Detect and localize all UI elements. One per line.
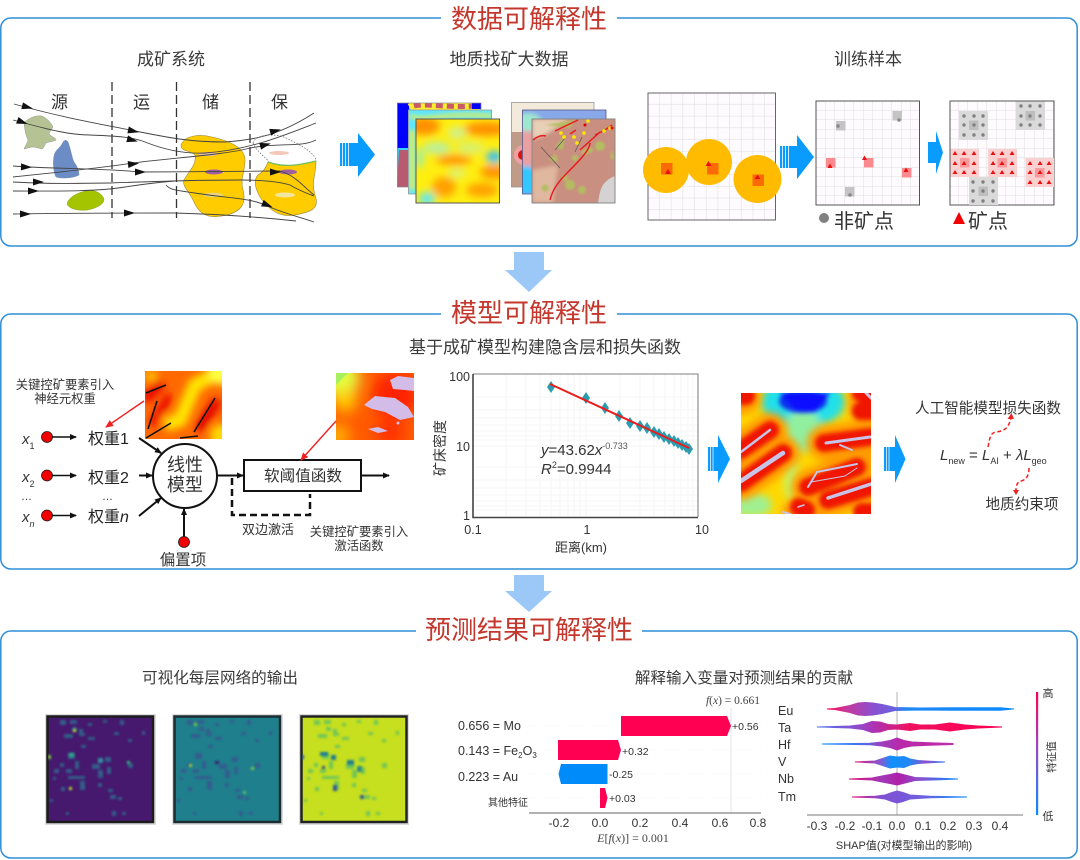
chart: log-log deposit density vs distance: =0.9944 [557,461,612,478]
box: 软阈值函数: 软阈值函数 [264,467,342,485]
colour bar legend [1036,686,1058,823]
bar: Mo: 0.656 = Mo [458,719,521,733]
chart: SHAP violin summary: V [778,755,787,769]
linear model node [153,444,217,508]
chart: SHAP waterfall: 0.0 [592,816,609,830]
bar: Fe2O3: 2 [518,751,523,760]
dashed bypass: 双边激活: 双边激活 [242,522,294,537]
panel: 预测结果可解释性 [1,615,1077,858]
note: 关键控矿要素引入神经元权重 [16,378,114,406]
chart: sparse sample grid [816,101,920,205]
arrow: to prediction map [708,435,730,483]
map stack: geophysical heat maps [397,103,508,206]
colour bar legend: 低 [1042,810,1054,823]
labels: 源 运 储 保: 保 [271,93,288,112]
subheading: 训练样本: 训练样本 [834,50,902,69]
arrow: model to results [505,575,552,612]
chart: SHAP waterfall: 0.4 [672,816,689,830]
subheading: 地质找矿大数据: 地质找矿大数据 [450,50,568,69]
heat map: weight [145,371,222,439]
violin: Eu [827,702,1014,716]
map: back layer [397,103,482,187]
chart: SHAP violin summary: 0.2 [940,819,957,833]
formula: geology-constrained loss: λL [1015,447,1032,464]
bar: Fe2O3: +0.32 [622,746,649,758]
subheading: 可视化每层网络的输出: 可视化每层网络的输出 [142,668,298,687]
arrow: data to model [505,252,552,292]
chart: log-log deposit density vs distance [432,370,709,555]
map: front layer [416,120,499,202]
linear model node: 线性 [167,455,203,475]
bias node [160,536,206,569]
formula: geology-constrained loss: 地质约束项 [986,496,1059,513]
arrow: to sparse samples [780,135,814,179]
colour bar legend: 高 [1042,686,1054,700]
arrow: to geological big data [340,133,375,177]
violin: Ta [817,722,1002,732]
bar: Au: 0.223 = Au [458,770,518,784]
ore fluid flow lines [13,102,316,222]
subheading: 基于成矿模型构建隐含层和损失函数: 基于成矿模型构建隐含层和损失函数 [409,338,681,357]
orebody: source rocks [24,116,104,210]
bar: Au [458,764,633,784]
bar: Mo: +0.56 [732,721,759,733]
map: middle layer [522,110,606,194]
feature map: layer 2 [172,714,283,825]
subheading: 成矿系统: 成矿系统 [137,50,205,69]
heat map: loss landscape [741,393,871,514]
legend: 矿点: 矿点 [968,210,1008,233]
map: front layer [532,119,615,203]
formula: geology-constrained loss: geo [1032,456,1047,466]
legend: 非矿点: 非矿点 [834,210,894,233]
chart: log-log deposit density vs distance: -0.733 [602,441,628,451]
bar: others: 其他特征 [488,796,528,809]
heading: 数据可解释性: 数据可解释性 [451,4,607,34]
bar: Fe2O3: 3 [532,751,537,760]
chart: log-log deposit density vs distance: 10 [456,440,470,454]
panel: 模型可解释性 [1,298,1077,569]
linear model node: 模型 [167,475,203,495]
labels: 源 运 储 保: 储 [202,93,219,112]
chart: log-log deposit density vs distance: 距离(km) [555,540,607,555]
chart: log-log deposit density vs distance: 0.1 [464,523,482,537]
note: 关键控矿要素引入激活函数: 激活函数 [334,538,384,553]
chart: SHAP violin summary: Ta [778,721,791,735]
subheading: 解释输入变量对预测结果的贡献: 解释输入变量对预测结果的贡献 [635,669,853,687]
chart: log-log deposit density vs distance: 2 [552,460,557,470]
inputs and weights: 1 [30,441,35,451]
chart: buffered sample grid [643,93,782,220]
chart: log-log deposit density vs distance: R [541,461,552,478]
violin: Hf [822,738,953,750]
chart: SHAP waterfall: 0.8 [750,816,767,830]
feature map: layer 1 [45,714,156,825]
inputs and weights [21,430,129,529]
chart: SHAP waterfall: 0.6 [712,816,729,830]
inputs and weights: n [30,519,35,529]
chart: SHAP violin summary: Eu [778,704,793,718]
chart: SHAP violin summary: 0.0 [889,819,906,833]
chart: SHAP violin summary: -0.1 [862,819,883,833]
labels: 源 运 储 保: 源 [51,93,68,112]
bar: Mo [458,716,759,736]
chart: expanded sample grid [950,101,1054,205]
chart: SHAP violin summary: Hf [778,738,791,752]
formula: geology-constrained loss: = [965,447,982,464]
orebody: reservoir [181,135,316,217]
legend: 矿点 [953,210,1008,233]
formula: geology-constrained loss: L [940,447,948,464]
inputs and weights: 权重1 [88,430,129,448]
chart: SHAP violin summary: -0.3 [807,819,828,833]
heading: 预测结果可解释性: 预测结果可解释性 [425,615,633,645]
chart: log-log deposit density vs distance: 1 [584,523,591,537]
heading: 模型可解释性: 模型可解释性 [451,298,607,328]
dashed bypass: 双边激活 [232,478,310,537]
inputs and weights: x [22,431,30,448]
note: 关键控矿要素引入激活函数 [310,525,408,553]
formula: geology-constrained loss: L [982,447,990,464]
inputs and weights: 权重2 [88,469,129,487]
bar: Fe2O3 [458,740,649,760]
formula: geology-constrained loss [915,399,1061,513]
labels: 源 运 储 保: 运 [133,93,150,112]
heat map: activation [336,373,414,440]
box: 软阈值函数 [244,460,361,491]
inputs and weights: … [21,491,32,503]
chart: SHAP violin summary: -0.2 [835,819,856,833]
chart: log-log deposit density vs distance: 100 [449,370,470,384]
formula: geology-constrained loss: AI [990,456,999,466]
chart: SHAP violin summary: SHAP值(对模型输出的影响) [836,838,972,852]
inputs and weights: 2 [30,479,35,489]
arrow: red pointer to activation [301,421,336,460]
arrow: to expanded samples [928,131,943,174]
map stack: geological maps [511,102,615,203]
bar: Fe2O3: 0.143 = Fe [458,744,518,758]
arrow: red pointer to weight [106,401,144,427]
chart: SHAP violin summary: 0.4 [992,819,1009,833]
colour bar legend: 特征值 [1045,741,1058,773]
bar: Au: -0.25 [609,769,633,781]
chart: SHAP waterfall: 0.2 [632,816,649,830]
formula: geology-constrained loss: + [999,447,1016,464]
diagram: 成矿系统 源运储保 [13,82,316,222]
map: middle layer [408,110,492,194]
formula: geology-constrained loss: new [948,456,965,466]
chart: SHAP waterfall: -0.2 [549,816,570,830]
chart: log-log deposit density vs distance: 矿床密度 [432,420,448,476]
violin: Nb [849,773,958,785]
inputs and weights: x [22,509,30,526]
chart: log-log deposit density vs distance: y=43.62x [541,442,602,459]
chart: log-log deposit density vs distance: 10 [695,523,709,537]
chart: log-log deposit density vs distance: 1 [463,509,470,523]
violin: Tm [852,791,967,803]
inputs and weights: … [102,491,113,503]
chart: SHAP violin summary: Tm [778,790,796,804]
chart: SHAP waterfall: f(x) = 0.661 [706,695,760,707]
note: 关键控矿要素引入激活函数: 关键控矿要素引入 [310,525,408,539]
labels: 源 运 储 保 [51,93,288,112]
chart: SHAP violin summary: Nb [778,772,794,786]
chart: SHAP violin summary: 0.1 [915,819,932,833]
inputs and weights: x [22,469,30,486]
chart: SHAP violin summary: 0.3 [966,819,983,833]
arrow: to loss function [884,435,906,483]
bar: Fe2O3: O [523,744,533,758]
panel: 数据可解释性 [1,4,1077,246]
chart: SHAP violin summary [778,686,1058,852]
violin: V [855,756,945,768]
bias node: 偏置项 [160,551,206,569]
note: 关键控矿要素引入神经元权重: 关键控矿要素引入 [16,378,114,392]
bar: others: +0.03 [609,793,636,805]
feature map: layer 3 [299,714,409,825]
bar: others [488,788,636,809]
diagram: neural network unit [16,357,417,569]
inputs and weights: 权重n [88,508,129,526]
map: back layer [511,102,594,187]
chart: SHAP waterfall: E[f(x)] = 0.001 [596,831,669,845]
note: 关键控矿要素引入神经元权重: 神经元权重 [34,392,96,406]
formula: geology-constrained loss: 人工智能模型损失函数 [915,399,1061,417]
chart: SHAP waterfall [458,695,767,845]
